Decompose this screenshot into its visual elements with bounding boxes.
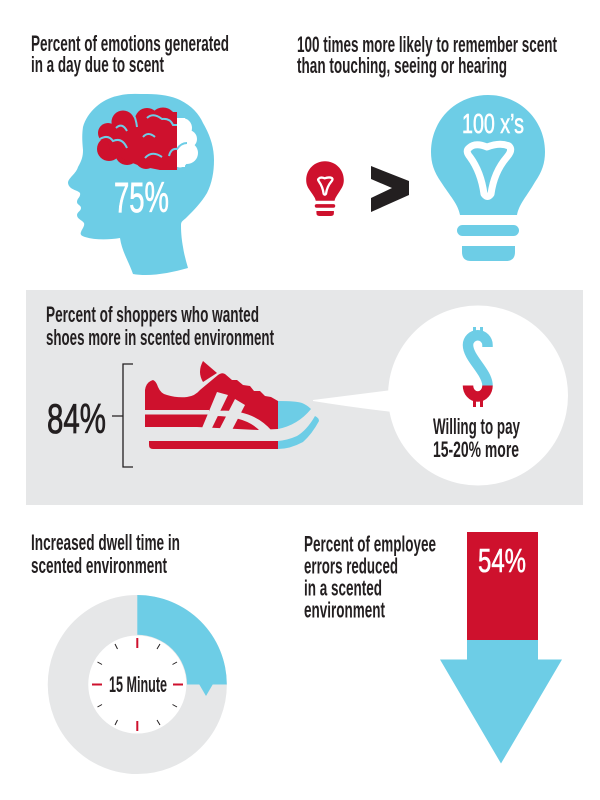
- heading: shoppers: Percent of shoppers who wanted: [46, 302, 259, 327]
- brain folds: [100, 111, 187, 158]
- callout text: Willing to pay: [433, 414, 520, 439]
- callout: willing to pay: [313, 306, 568, 486]
- clock ticks grey: [98, 644, 177, 725]
- heading: errors: Percent of employee: [304, 532, 436, 556]
- heading: emotions: Percent of emotions generated: [31, 31, 229, 56]
- icon: brain: [97, 108, 198, 170]
- icon: dollar sign: [468, 327, 488, 407]
- label: 100 x's: 100 x’s: [462, 108, 524, 139]
- heading: emotions: in a day due to scent: [31, 52, 164, 77]
- icon: shoe: [144, 361, 319, 449]
- panel: shoppers: [26, 290, 583, 505]
- heading: errors: in a scented: [304, 576, 382, 600]
- panel background: [26, 290, 583, 505]
- shoe stripes: [144, 392, 272, 431]
- shoe toe cap: [278, 401, 311, 429]
- value: 84%: 84%: [47, 395, 106, 442]
- heading: errors: [304, 532, 436, 622]
- arrow blue head: [440, 640, 562, 764]
- heading: remember scent: [297, 32, 557, 78]
- callout text: 15-20% more: [433, 437, 519, 462]
- label: 15 Minute: 15 Minute: [109, 672, 167, 697]
- donut pointer: [199, 684, 213, 696]
- arrow: down: [440, 532, 562, 764]
- chart: clock donut: [68, 595, 227, 754]
- heading: shoppers: [46, 302, 274, 350]
- arrow red share: [467, 532, 538, 640]
- brain white remainder: [172, 118, 198, 168]
- shoe sole: [149, 441, 278, 449]
- clock ticks red: [92, 638, 183, 731]
- heading: dwell time: [31, 530, 180, 578]
- icon: large blue bulb: [431, 95, 545, 261]
- donut quarter: [137, 595, 227, 684]
- icon: head silhouette: [68, 94, 214, 275]
- callout text: [433, 414, 520, 462]
- heading: shoppers: shoes more in scented environment: [46, 325, 274, 350]
- shoe upper: [145, 373, 278, 430]
- shoe toe sole: [278, 416, 319, 449]
- heading: emotions: [31, 31, 229, 77]
- donut track: [68, 615, 207, 754]
- heading: dwell time: Increased dwell time in: [31, 530, 180, 555]
- panel: remembering scent: [297, 32, 557, 261]
- callout bubble: [313, 390, 392, 412]
- value: 54%: 54%: [478, 542, 526, 579]
- heading: errors: environment: [304, 598, 385, 622]
- bracket: [112, 364, 133, 467]
- icon: greater-than sign: [371, 166, 409, 212]
- value: 75%: 75%: [114, 174, 169, 222]
- shoe tongue: [200, 361, 217, 382]
- panel: employee errors: [304, 532, 562, 764]
- icon: small red bulb: [306, 161, 344, 216]
- heading: dwell time: scented environment: [31, 553, 167, 578]
- panel: dwell time: [31, 530, 227, 754]
- brain red share: [97, 108, 177, 170]
- heading: errors: errors reduced: [304, 554, 398, 578]
- panel: emotions due to scent: [31, 31, 229, 275]
